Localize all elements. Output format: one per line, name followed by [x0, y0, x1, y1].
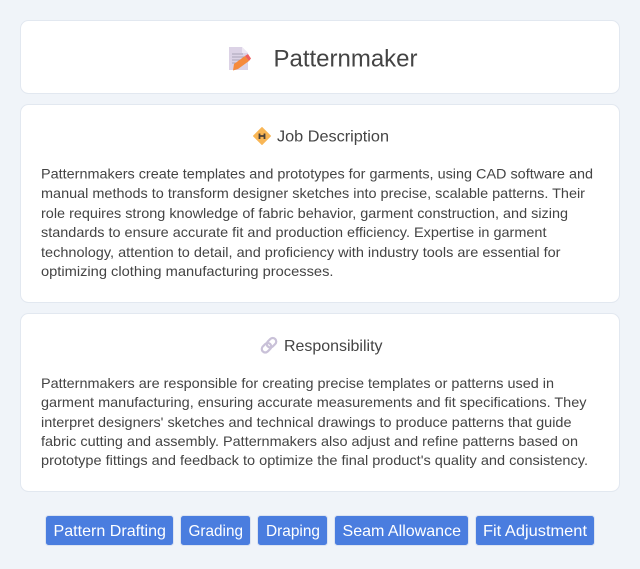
tag: seam allowance [334, 516, 468, 546]
text block: responsibility: Patternmakers are responsible for creating precise templates or patterns used in [41, 375, 554, 391]
tag: grading [180, 516, 250, 546]
tag: pattern drafting: Pattern Drafting [54, 523, 166, 540]
tag: pattern drafting [46, 516, 174, 546]
tag: draping: Draping [266, 523, 320, 540]
text block: job description: standards to ensure accurate fit and production efficiency. Expertise in garment [41, 224, 547, 240]
text block: responsibility: prototype fittings and feedback to optimize the final product's quality and consistency. [41, 452, 588, 468]
text block: job description: manual methods to transform designer sketches into precise, scalable patterns. Their [41, 185, 585, 201]
skill tags row [46, 516, 594, 546]
panel: title card [20, 20, 620, 94]
heading: responsibility: Responsibility [284, 338, 382, 355]
icon: document with pencil [229, 47, 251, 70]
text block: job description: Patternmakers create templates and prototypes for garments, using CAD software and [41, 166, 593, 182]
text block: job description [41, 166, 593, 279]
text block: job description: technology, attention to detail, and proficiency with industry tools are essential for [41, 244, 561, 260]
heading: job description: Job Description [277, 128, 389, 146]
tag: seam allowance: Seam Allowance [342, 523, 461, 540]
text block: job description: role requires strong knowledge of fabric behavior, garment construction, and sizing [41, 205, 568, 221]
text block: responsibility: interpret designers' sketches and technical drawings to produce patterns that guide [41, 414, 572, 430]
text block: responsibility: garment manufacturing, ensuring accurate measurements and fit specifications. They [41, 394, 586, 410]
text block: job description: optimizing clothing manufacturing processes. [41, 263, 334, 279]
panel: job description [20, 104, 620, 302]
tag: draping [258, 516, 328, 546]
icon: chain link [260, 337, 278, 354]
text block: responsibility: fabric cutting and assembly. Patternmakers also adjust and refine patterns based on [41, 433, 578, 449]
tag: fit adjustment: Fit Adjustment [483, 523, 588, 540]
panel: responsibility [20, 314, 620, 492]
tag: fit adjustment [476, 516, 594, 546]
icon: warning diamond [254, 128, 270, 144]
tag: grading: Grading [188, 523, 243, 540]
title: Patternmaker [274, 46, 418, 72]
text block: responsibility [41, 375, 588, 468]
